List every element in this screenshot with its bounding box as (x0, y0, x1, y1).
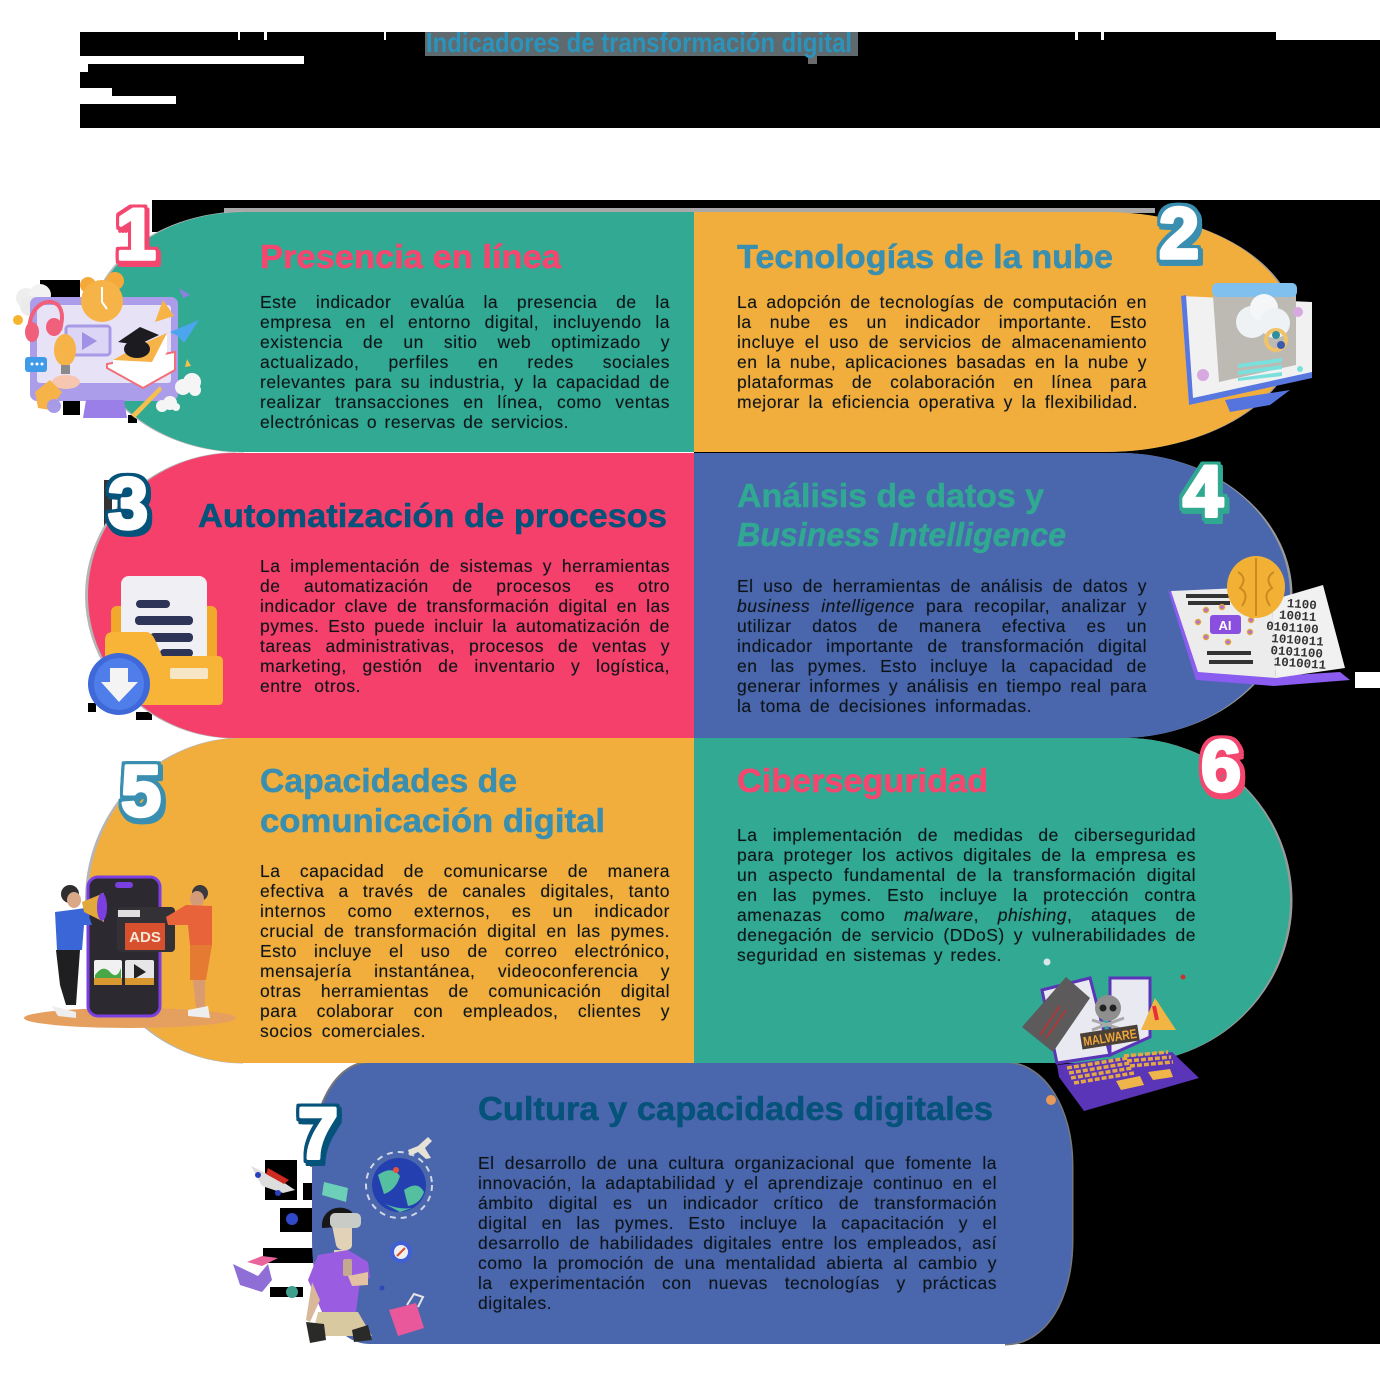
number 7: 7 (298, 1094, 338, 1174)
heading: capacidades de comunicación digital: comunicación digital (260, 802, 605, 839)
panel shape: orange (88, 738, 694, 1063)
number 5: 5 (121, 752, 161, 832)
text block: presencia en línea (260, 292, 690, 442)
heading: análisis de datos y business intelligence: Análisis de datos y (737, 477, 1045, 514)
heading: capacidades de comunicación digital: Capacidades de (260, 762, 517, 799)
panel: cultura y capacidades digitales (233, 1063, 1072, 1344)
binary digits: 0101100 (1270, 644, 1323, 662)
text block: presencia en línea: existencia de un sitio web optimizado y (260, 332, 670, 352)
malware label: MALWARE (1082, 1026, 1138, 1049)
text block: cultura y capacidades digitales: digitales. (478, 1293, 552, 1313)
text block: cultura y capacidades digitales: como la promoción de una mentalidad abierta al cambio y (478, 1253, 997, 1273)
text block: presencia en línea: electrónicas o reservas de servicios. (260, 412, 569, 432)
text block: tecnologías de la nube: La adopción de tecnologías de computación en (737, 292, 1147, 312)
text block: automatización de procesos: entre otros. (260, 676, 361, 696)
text block: automatización de procesos: pymes. Esto puede incluir la automatización de (260, 616, 670, 636)
heading: análisis de datos y business intelligence: Business Intelligence (737, 516, 1066, 553)
text block: automatización de procesos (260, 556, 690, 706)
text block: capacidades de comunicación digital: efectiva a través de canales digitales, tanto (260, 881, 670, 901)
title: Indicadores de transformación digital (426, 27, 852, 58)
text block: cultura y capacidades digitales (478, 1153, 1018, 1323)
text block: presencia en línea: relevantes para su industria, y la capacidad de (260, 372, 670, 392)
binary digits: 0101100 (1266, 620, 1319, 637)
number 2: 2 (1159, 194, 1199, 274)
panel shape: teal (91, 212, 694, 452)
panel: automatización de procesos (88, 453, 694, 738)
text block: ciberseguridad: denegación de servicio (DDoS) y vulnerabilidades de (737, 925, 1196, 945)
text block: cultura y capacidades digitales: digital en las pymes. Esto incluye la capacitación y el (478, 1213, 997, 1233)
text block: tecnologías de la nube: la nube es un indicador importante. Esto (737, 312, 1147, 332)
text block: cultura y capacidades digitales: innovación, la adaptabilidad y el aprendizaje continuo en el (478, 1173, 997, 1193)
panel shape: pink (88, 453, 694, 738)
AI chip (1210, 615, 1241, 634)
text block: análisis de datos: generar informes y análisis en tiempo real para (737, 676, 1147, 696)
panel: presencia en línea (13, 195, 694, 452)
text block: tecnologías de la nube: en la nube, aplicaciones basadas en la nube y (737, 352, 1147, 372)
text block: análisis de datos: El uso de herramientas de análisis de datos y (737, 576, 1147, 596)
heading: cultura y capacidades digitales: Cultura y capacidades digitales (478, 1090, 993, 1127)
text block: presencia en línea: actualizado, perfiles en redes sociales (260, 352, 670, 372)
panel shape: orange (694, 212, 1295, 452)
text block: ciberseguridad: La implementación de medidas de ciberseguridad (737, 825, 1196, 845)
icon: monitor with learning objects (13, 272, 201, 418)
number 1: 1 (116, 195, 156, 275)
text block: cultura y capacidades digitales: desarrollo de habilidades digitales entre los empleados, así (478, 1233, 997, 1253)
text block: tecnologías de la nube: plataformas de colaboración en línea para (737, 372, 1147, 392)
text block: análisis de datos: indicador importante de transformación digital (737, 636, 1147, 656)
binary digits: 1010011 (1273, 655, 1327, 673)
text block: capacidades de comunicación digital: para colaborar con empleados, clientes y (260, 1001, 670, 1021)
text block: ciberseguridad: en las pymes. Esto incluye la protección contra (737, 885, 1196, 905)
text block: automatización de procesos: de automatización de procesos es otro (260, 576, 670, 596)
text block: presencia en línea: realizar transacciones en línea, como ventas (260, 392, 670, 412)
ADS sign (125, 923, 165, 950)
AI chip: AI (1218, 618, 1232, 633)
panel: capacidades de comunicación digital (24, 738, 694, 1063)
text block: cultura y capacidades digitales: la experimentación con nuevas tecnologías y prácticas (478, 1273, 997, 1293)
heading: ciberseguridad: Ciberseguridad (737, 762, 988, 799)
binary digits: 1100 (1286, 597, 1317, 613)
text block: capacidades de comunicación digital: Esto incluye el uso de correo electrónico, (260, 941, 670, 961)
panel: análisis de datos (694, 452, 1350, 738)
text block: capacidades de comunicación digital: mensajería instantánea, videoconferencia y (260, 961, 670, 981)
text block: análisis de datos: en las pymes. Esto incluye la capacidad de (737, 656, 1147, 676)
text block: ciberseguridad: un aspecto fundamental de la transformación digital (737, 865, 1196, 885)
panel: tecnologías de la nube (694, 194, 1312, 452)
text block: capacidades de comunicación digital: La capacidad de comunicarse de manera (260, 861, 670, 881)
icon: folder with download (88, 576, 223, 715)
number 6: 6 (1201, 727, 1241, 807)
text block: tecnologías de la nube: incluye el uso de servicios de almacenamiento (737, 332, 1147, 352)
text block: tecnologías de la nube: mejorar la eficiencia operativa y la flexibilidad. (737, 392, 1138, 412)
heading: presencia en línea: Presencia en línea (260, 238, 562, 275)
text block: ciberseguridad: amenazas como malware, phishing, ataques de (737, 905, 1196, 925)
icon: cloud on screen (1181, 283, 1312, 412)
text block: automatización de procesos: marketing, gestión de inventario y logística, (260, 656, 670, 676)
icon: person with VR and travel items (233, 1137, 432, 1343)
number 3: 3 (108, 464, 148, 544)
text block: ciberseguridad (737, 825, 1217, 975)
text block: ciberseguridad: seguridad en sistemas y redes. (737, 945, 1002, 965)
heading: análisis de datos y business intelligence (737, 477, 1066, 553)
ADS sign: ADS (129, 929, 161, 946)
text block: cultura y capacidades digitales: ámbito digital es un indicador crítico de transformación (478, 1193, 997, 1213)
heading: automatización de procesos: Automatización de procesos (198, 497, 667, 534)
heading: capacidades de comunicación digital (260, 762, 605, 839)
text block: capacidades de comunicación digital: socios comerciales. (260, 1021, 426, 1041)
text block: ciberseguridad: para proteger los activos digitales de la empresa es (737, 845, 1196, 865)
text block: presencia en línea: Este indicador evalúa la presencia de la (260, 292, 670, 312)
number 4: 4 (1183, 452, 1223, 532)
panel shape: blue (694, 453, 1290, 738)
heading: tecnologías de la nube: Tecnologías de la nube (737, 238, 1113, 275)
text block: análisis de datos: utilizar datos de manera efectiva es un (737, 616, 1147, 636)
text block: capacidades de comunicación digital: internos como externos, es un indicador (260, 901, 670, 921)
panel: ciberseguridad (694, 727, 1290, 1063)
icon: book with brain and AI chip (1168, 556, 1350, 686)
icon: broken laptop with malware (1022, 958, 1199, 1111)
text block: cultura y capacidades digitales: El desarrollo de una cultura organizacional que fomente la (478, 1153, 997, 1173)
text block: capacidades de comunicación digital: crucial de transformación digital en las pymes. (260, 921, 670, 941)
binary digits: 10011 (1278, 609, 1317, 625)
text block: automatización de procesos: indicador clave de transformación digital en las (260, 596, 670, 616)
text block: automatización de procesos: tareas administrativas, procesos de ventas y (260, 636, 670, 656)
text block: tecnologías de la nube (737, 292, 1167, 422)
text block: capacidades de comunicación digital (260, 861, 690, 1051)
binary digits (1263, 596, 1331, 673)
text block: automatización de procesos: La implementación de sistemas y herramientas (260, 556, 670, 576)
binary digits: 1010011 (1271, 632, 1324, 650)
text block: análisis de datos: business intelligence para recopilar, analizar y (737, 596, 1147, 616)
panel shape: blue (312, 1063, 1072, 1344)
text block: análisis de datos (737, 576, 1167, 726)
panel shape: teal (694, 738, 1290, 1063)
text block: presencia en línea: empresa en el entorno digital, incluyendo la (260, 312, 670, 332)
icon: phone with two people (24, 877, 236, 1028)
text block: capacidades de comunicación digital: otras herramientas de comunicación digital (260, 981, 670, 1001)
text block: análisis de datos: la toma de decisiones informadas. (737, 696, 1032, 716)
